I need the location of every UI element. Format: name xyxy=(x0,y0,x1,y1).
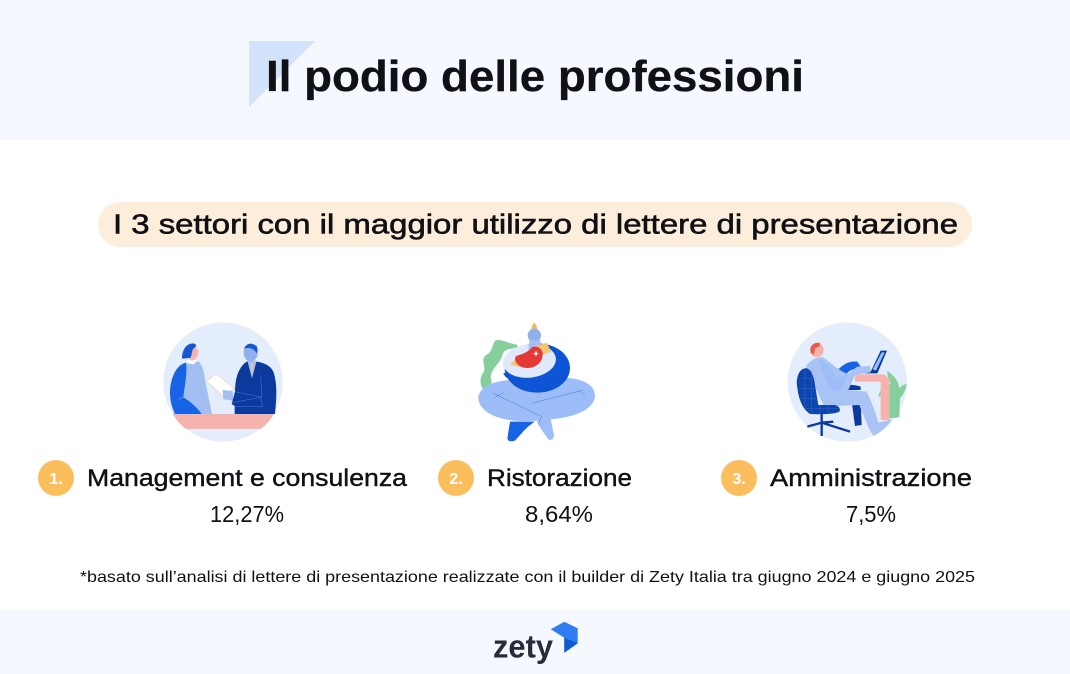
panel: amministrazione xyxy=(721,322,972,527)
icon: two people at a desk xyxy=(163,322,283,442)
logo: zety xyxy=(493,622,578,664)
badge: 1: 1. xyxy=(49,471,63,488)
badge: 3 xyxy=(721,460,757,496)
header band xyxy=(0,0,1070,140)
subtitle pill: I 3 settori con il maggior utilizzo di lettere di presentazione xyxy=(113,208,958,240)
badge: 2 xyxy=(438,460,474,496)
label: ristorazione: Ristorazione xyxy=(487,465,632,492)
badge: 1 xyxy=(38,460,74,496)
subtitle pill xyxy=(98,202,972,247)
label: amministrazione: Amministrazione xyxy=(770,465,972,492)
badge: 2: 2. xyxy=(449,471,463,488)
badge: 3: 3. xyxy=(732,471,746,488)
value: 7,5%: 7,5% xyxy=(846,501,896,527)
icon: seated figure with bird xyxy=(478,323,595,441)
icon: person at a laptop xyxy=(788,322,907,442)
footer band xyxy=(0,610,1070,674)
logo: zety: zety xyxy=(493,628,553,664)
label: management e consulenza: Management e consulenza xyxy=(87,465,408,492)
icon: title triangle xyxy=(249,41,315,107)
value: 12,27%: 12,27% xyxy=(210,501,284,527)
panel: ristorazione xyxy=(438,323,632,527)
footnote: *basato sull’analisi di lettere di presentazione realizzate con il builder di Zety Italia tra giugno 2024 e giugno 2025 xyxy=(80,569,975,586)
panel: management e consulenza xyxy=(38,322,408,527)
value: 8,64%: 8,64% xyxy=(525,501,593,527)
title: Il podio delle professioni xyxy=(266,52,804,101)
